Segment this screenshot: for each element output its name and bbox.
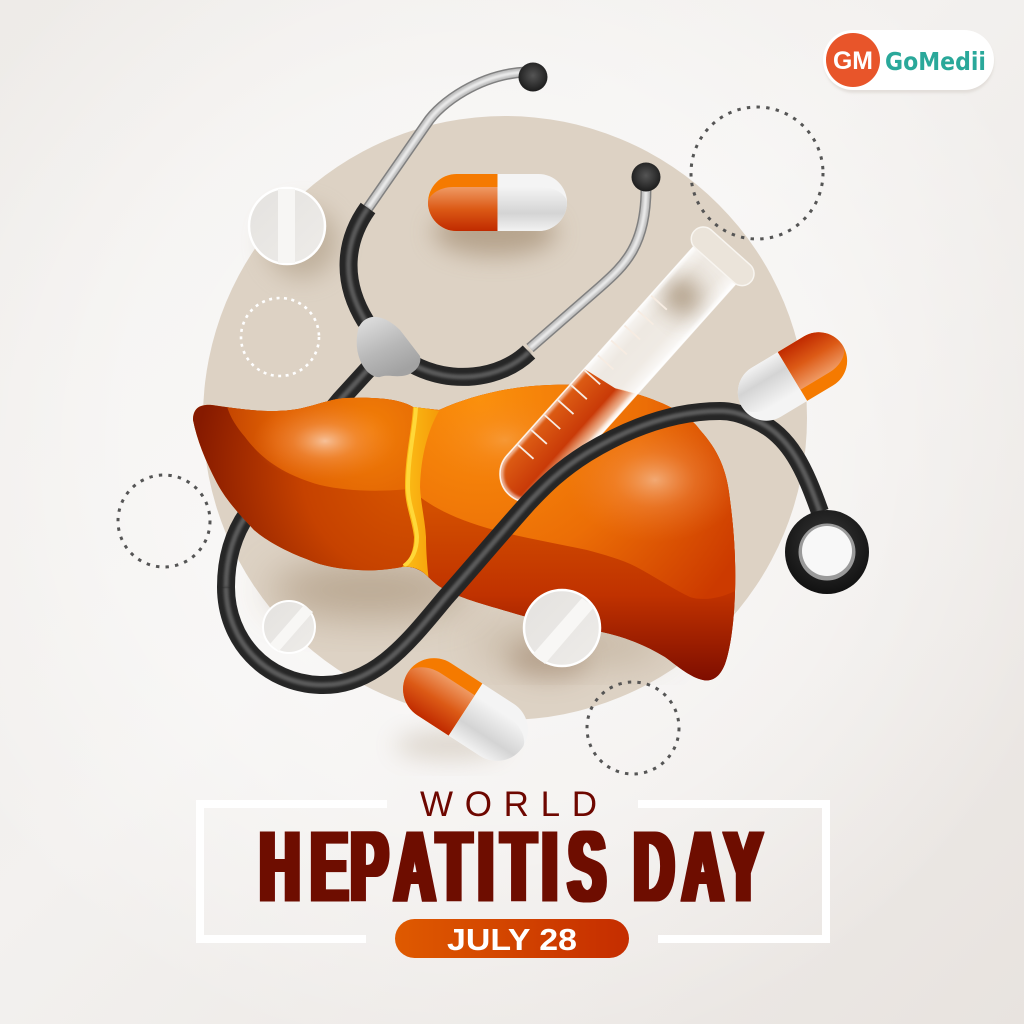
tablet bottom left [263,601,315,653]
test tube ticks [518,296,667,459]
dashed circle bottom [587,682,679,774]
stethoscope tube behind liver [226,365,372,587]
tablet top left [249,188,338,278]
stethoscope upper tubes and ear pieces [349,62,660,377]
capsule right [727,322,858,431]
test tube [499,226,755,501]
test tube liquid [500,369,634,500]
date pill: JULY 28 [447,922,577,957]
liver right lobe [420,384,736,680]
liver [193,384,736,680]
logo monogram: GM [833,47,873,75]
heading: hepatitis day: HEPATITIS DAY [260,812,762,923]
capsule top [428,174,567,256]
stethoscope junction [357,317,420,377]
tablet bottom center [508,590,600,680]
dashed circle white [241,298,319,376]
capsule bottom [391,646,540,773]
logo badge [823,30,994,93]
dashed circle left [118,475,210,567]
heading: world: WORLD [420,785,597,824]
liver left lobe upper [224,395,420,491]
logo wordmark: GoMedii [885,47,986,76]
stethoscope chest piece [785,510,869,594]
liver left lobe [185,395,420,580]
dashed circle top right [691,107,823,239]
test tube lip [686,222,759,291]
liver yellow ligament [402,406,439,582]
stethoscope front tube [226,411,820,685]
date pill [395,919,629,958]
liver right lobe upper [420,380,745,599]
title frame [196,800,830,943]
beige backdrop circle [203,116,807,720]
